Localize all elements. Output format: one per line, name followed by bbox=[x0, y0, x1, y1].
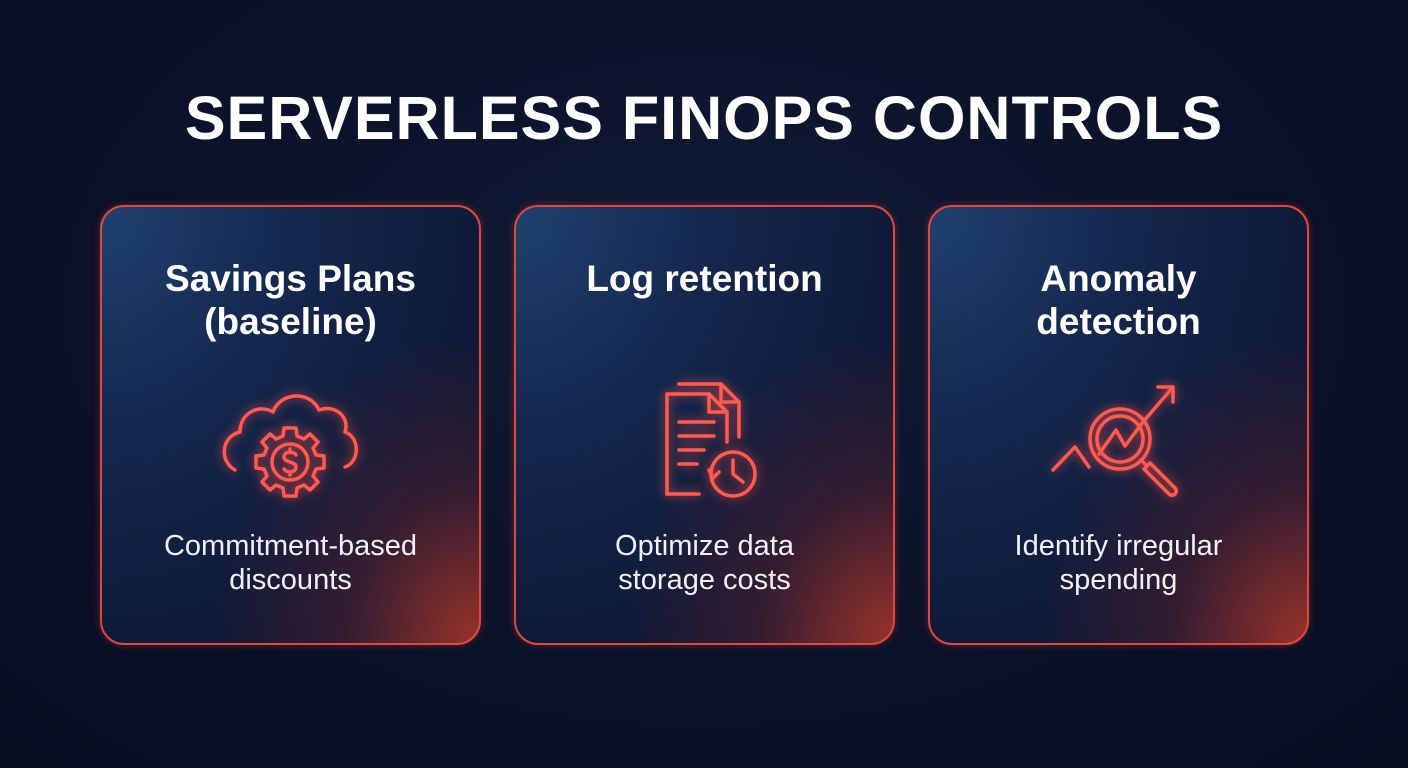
heading: anomaly detection: Anomaly bbox=[1040, 258, 1197, 299]
heading: log retention: Log retention bbox=[586, 258, 823, 299]
panel: savings plans bbox=[100, 205, 481, 645]
description bbox=[615, 530, 794, 596]
heading: savings plans: Savings Plans bbox=[165, 258, 416, 299]
description: Identify irregular bbox=[1015, 530, 1222, 562]
description: storage costs bbox=[618, 564, 791, 596]
description: spending bbox=[1060, 564, 1177, 596]
heading: savings plans bbox=[165, 258, 416, 342]
panel: log retention bbox=[514, 205, 895, 645]
description bbox=[1015, 530, 1222, 596]
heading: anomaly detection: detection bbox=[1036, 301, 1201, 342]
title: SERVERLESS FINOPS CONTROLS bbox=[185, 84, 1223, 152]
icon: document with clock bbox=[658, 374, 764, 505]
description: discounts bbox=[229, 564, 352, 596]
icon: magnifier over chart bbox=[1046, 378, 1184, 503]
description bbox=[164, 530, 417, 596]
icon: cloud gear dollar bbox=[215, 386, 365, 505]
description: Optimize data bbox=[615, 530, 794, 562]
panel: anomaly detection bbox=[928, 205, 1309, 645]
heading: savings plans: (baseline) bbox=[204, 301, 377, 342]
heading: anomaly detection bbox=[1036, 258, 1201, 342]
description: Commitment-based bbox=[164, 530, 417, 562]
